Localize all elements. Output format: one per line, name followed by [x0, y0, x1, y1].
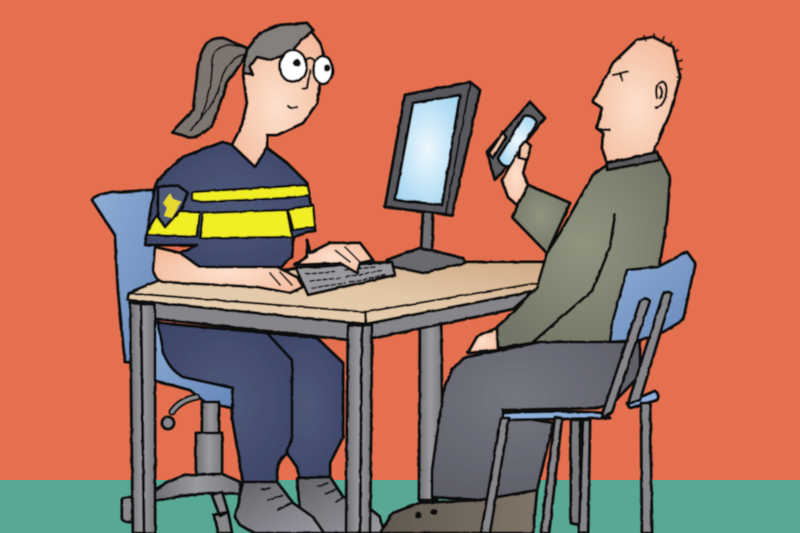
man's shoe — [380, 490, 537, 533]
officer's forearm and hand on desk — [153, 247, 303, 293]
man's jacket sleeve — [512, 185, 570, 253]
officer's glasses and face — [280, 50, 332, 108]
officer's ponytail — [172, 38, 247, 138]
far trouser leg — [267, 333, 343, 478]
officer's uniform shirt — [145, 142, 315, 267]
officer's right arm and hand on keyboard — [295, 240, 373, 273]
desk — [128, 262, 548, 533]
man's hand on lap — [468, 328, 498, 353]
smartphone — [487, 102, 545, 180]
near boot — [235, 482, 324, 533]
officer's head and neck — [232, 30, 323, 167]
floor — [0, 480, 800, 533]
man's face — [597, 72, 666, 130]
man's chair frame — [481, 292, 672, 533]
computer monitor — [385, 82, 480, 273]
man's jacket — [497, 157, 670, 348]
far boot — [297, 477, 384, 533]
man's chair back — [610, 252, 695, 342]
man's forearm — [502, 142, 530, 205]
man's head — [593, 37, 680, 163]
far desk leg — [419, 320, 442, 500]
officer's hair — [243, 23, 313, 75]
shoulder badge — [158, 185, 188, 227]
man's trousers — [432, 342, 640, 500]
man's collar — [607, 152, 660, 170]
officer's swivel chair — [92, 190, 240, 533]
keyboard — [296, 262, 395, 295]
man's hair stubble — [644, 34, 682, 78]
yellow reflective stripes — [147, 185, 315, 238]
near trouser leg — [158, 323, 292, 482]
